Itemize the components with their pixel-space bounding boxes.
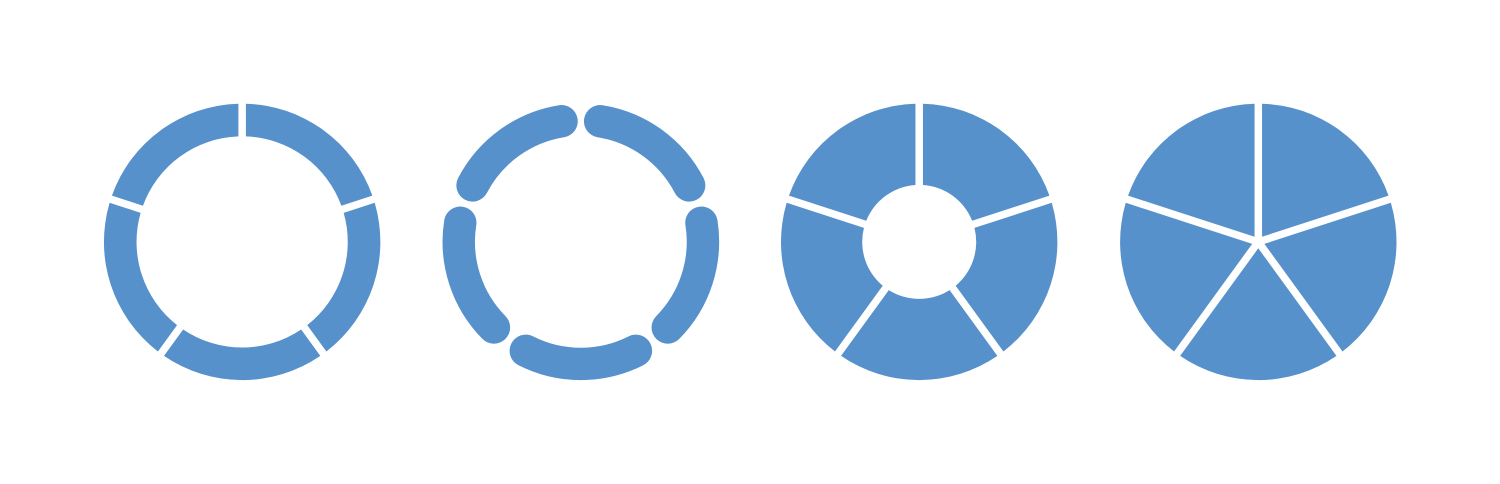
segment: top left [473,121,562,185]
slice: top right [1262,104,1389,237]
segment: right [668,223,703,328]
segment: top right [923,104,1049,221]
chart: thick donut with five segments [781,104,1057,380]
segment: right [956,203,1057,351]
slice: left [1120,203,1252,351]
slice: bottom [1180,248,1336,380]
segment: left [781,203,883,351]
chart: ring with five rounded segments [459,121,703,364]
slice: top left [1128,104,1255,237]
segment: top right [246,104,372,206]
segment: left [459,223,494,328]
segment: top left [789,104,915,221]
segment: bottom [526,351,636,364]
segment: left [104,203,177,351]
segment: right [307,203,380,351]
chart: thin ring with five flat segments [104,104,380,380]
chart: full pie with five slices [1120,104,1397,380]
segment: bottom [841,290,997,380]
segment: bottom [164,329,320,380]
segment: top left [112,104,238,206]
slice: right [1264,203,1397,351]
segment: top right [600,121,689,185]
